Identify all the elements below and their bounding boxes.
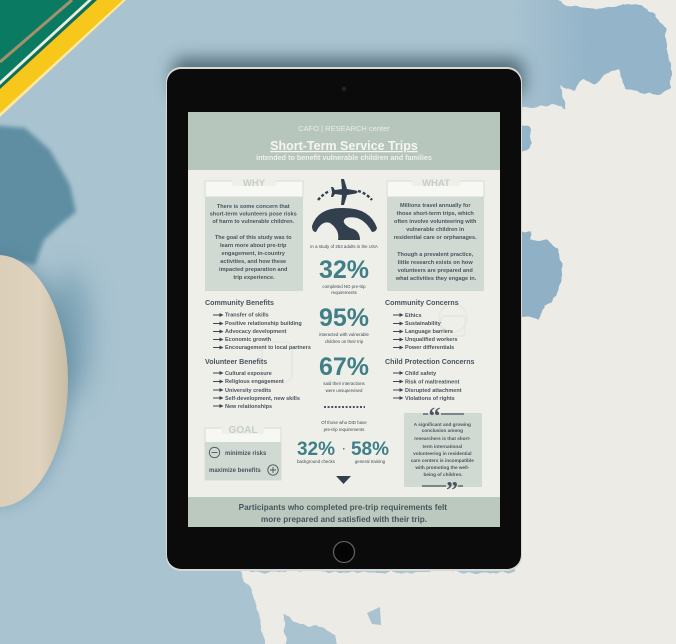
- arrow: down triangle: [336, 476, 351, 484]
- panel: what: residential care or orphanages.: [394, 235, 477, 241]
- list: volunteer benefits: Volunteer Benefits: [205, 358, 267, 366]
- panel: why: [205, 176, 303, 291]
- tablet shadow: [172, 58, 524, 98]
- stat: 95%: children on their trip: [325, 339, 364, 344]
- pre-trip requirement stats: 58%: [351, 439, 389, 460]
- list: community benefits: Encouragement to local partners: [225, 345, 311, 351]
- callout: quote: care centers is incompatible: [411, 458, 474, 463]
- subtitle: intended to benefit vulnerable children and families: [256, 153, 432, 162]
- panel: why: impacted preparation and: [219, 267, 288, 273]
- panel: goal: minimize risks: [225, 451, 267, 457]
- stat: 95%: 95%: [319, 304, 369, 332]
- stat: 32%: completed NO pre-trip: [322, 284, 366, 289]
- callout: quote: with promoting the well-: [414, 465, 470, 470]
- callout: quote: “: [428, 404, 440, 430]
- panel: what: [387, 176, 484, 291]
- list: volunteer benefits: Cultural exposure: [225, 371, 272, 377]
- panel: why: activities, and how these: [220, 259, 286, 265]
- list: child protection concerns: Risk of maltreatment: [405, 380, 460, 386]
- list: volunteer benefits: New relationships: [225, 404, 272, 410]
- header band: [188, 112, 500, 170]
- list: community concerns: Unqualified workers: [405, 337, 458, 343]
- dotted divider: [324, 406, 365, 408]
- panel: what: what activities they engage in.: [395, 276, 477, 282]
- callout: quote: volunteering in residential: [413, 451, 472, 456]
- callout: quote: being of children.: [423, 472, 463, 477]
- pre-trip requirement stats: [297, 420, 389, 464]
- panel: goal: GOAL: [229, 425, 257, 436]
- stat: 67%: 67%: [319, 353, 369, 381]
- icon: plus: [268, 465, 278, 475]
- panel: what: Though a prevalent practice,: [397, 252, 474, 258]
- callout: quote: ”: [446, 478, 458, 504]
- list: community benefits: Advocacy development: [225, 329, 287, 335]
- list: community benefits: Transfer of skills: [225, 312, 269, 318]
- icon: plane over globe: [312, 179, 377, 240]
- plate: [0, 250, 72, 507]
- list: volunteer benefits: Self-development, new skills: [225, 396, 300, 402]
- organisation name: CAFO | RESEARCH center: [298, 124, 390, 133]
- list: community benefits: Positive relationship building: [225, 321, 302, 327]
- stat: 67%: were unsupervised: [326, 388, 363, 393]
- dark wash stain: [0, 125, 76, 265]
- list: community concerns: Power differentials: [405, 345, 454, 351]
- pre-trip requirement stats: Of those who DID have: [321, 420, 367, 425]
- panel: why: trip experience.: [233, 275, 275, 281]
- pre-trip requirement stats: ·: [342, 444, 346, 454]
- callout: quote: A significant and growing: [414, 422, 471, 427]
- footer band: [188, 497, 500, 527]
- icon: minus: [209, 447, 220, 458]
- panel: why: The goal of this study was to: [215, 235, 292, 241]
- callout: quote: term international: [423, 444, 462, 449]
- arrows: [393, 373, 400, 398]
- list: community concerns: [385, 299, 459, 351]
- panel: why: learn more about pre-trip: [220, 243, 287, 249]
- infographic screen: [188, 112, 500, 527]
- panel: why: engagement, in-country: [222, 251, 286, 257]
- stat: 32%: 32%: [319, 256, 369, 284]
- stat: 67%: said their interactions: [323, 381, 366, 386]
- panel: what: little research exists on how: [398, 260, 473, 266]
- footer band: Participants who completed pre-trip requirements felt: [239, 503, 447, 512]
- study note: In a study of 253 adults in the USA: [310, 244, 378, 249]
- panel: why: short-term volunteers pose risks: [210, 212, 297, 218]
- arrows: [213, 373, 220, 406]
- list: community concerns: Ethics: [405, 313, 422, 319]
- panel: goal: [205, 422, 281, 480]
- arrows: [213, 315, 220, 348]
- list: child protection concerns: Child safety: [405, 371, 437, 377]
- panel: why: There is some concern that: [217, 204, 290, 210]
- list: community benefits: Economic growth: [225, 337, 272, 343]
- list: community concerns: Community Concerns: [385, 299, 459, 307]
- list: community benefits: Community Benefits: [205, 299, 274, 307]
- pre-trip requirement stats: 32%: [297, 439, 335, 460]
- list: child protection concerns: Violations of rights: [405, 396, 455, 402]
- panel: why: WHY: [243, 178, 266, 189]
- stat: 95%: [319, 304, 369, 344]
- callout: quote: researchers is that short-: [414, 436, 471, 441]
- panel: what: volunteers are prepared and: [398, 268, 473, 274]
- panel: what: often involve volunteering with: [394, 219, 477, 225]
- footer band: more prepared and satisfied with their trip.: [261, 515, 427, 524]
- panel: what: Millions travel annually for: [400, 203, 471, 209]
- callout: quote: [404, 404, 482, 504]
- book corner: green and yellow stripes: [0, 0, 126, 117]
- panel: why: of harm to vulnerable children.: [212, 219, 295, 225]
- list: community concerns: Language barriers: [405, 329, 453, 335]
- home button: [334, 542, 354, 562]
- list: volunteer benefits: [205, 358, 301, 410]
- pre-trip requirement stats: general training: [355, 459, 386, 464]
- panel: what: vulnerable children in: [406, 227, 465, 233]
- list: community concerns: Sustainability: [405, 321, 442, 327]
- list: child protection concerns: [385, 358, 475, 402]
- title: Short-Term Service Trips: [270, 139, 418, 153]
- stat: 95%: interacted with vulnerable: [319, 332, 369, 337]
- list: community benefits: [205, 299, 311, 351]
- list: volunteer benefits: Religious engagement: [225, 379, 284, 385]
- panel: goal: maximize benefits: [209, 468, 261, 474]
- pre-trip requirement stats: background checks: [297, 459, 336, 464]
- pre-trip requirement stats: pre-trip requirements: [324, 427, 365, 432]
- panel: what: those short-term trips, which: [397, 211, 474, 217]
- camera: [342, 87, 346, 91]
- tablet: [166, 67, 522, 571]
- watermark icons: [262, 304, 467, 382]
- callout: quote: conclusion among: [422, 428, 463, 433]
- list: volunteer benefits: University credits: [225, 388, 271, 394]
- arrows: [393, 315, 400, 348]
- list: child protection concerns: Child Protection Concerns: [385, 358, 475, 366]
- stat: 32%: requirements: [331, 290, 358, 295]
- list: child protection concerns: Disrupted attachment: [405, 388, 462, 394]
- panel: what: WHAT: [422, 178, 450, 189]
